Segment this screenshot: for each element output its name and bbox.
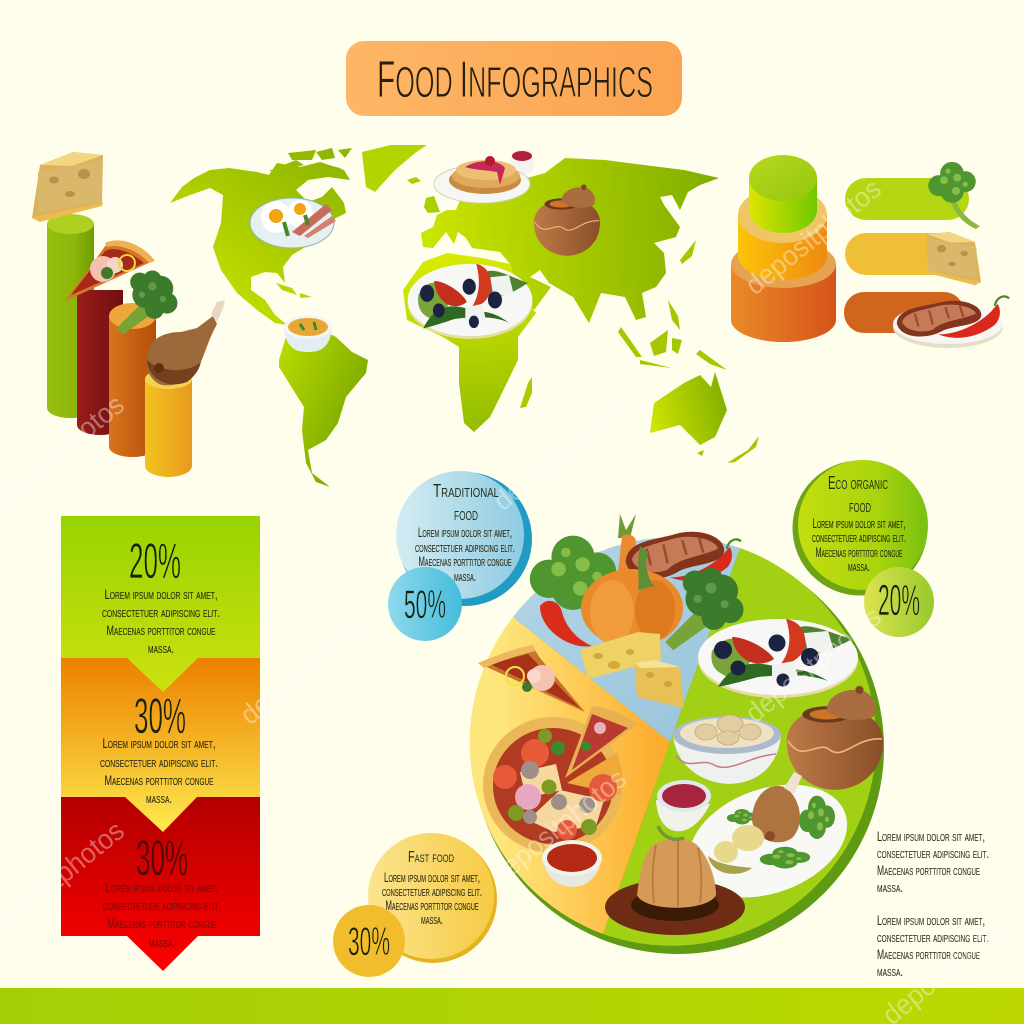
food: broccoli: [665, 568, 744, 650]
text: 30% block: Maecenas porttitor congue: [104, 772, 214, 788]
text: 20% block: 20%: [129, 533, 181, 589]
text: 30% block: consectetuer adipiscing elit.: [100, 754, 218, 770]
plate: steak and pepper: [893, 296, 1009, 348]
icon: parsley: [928, 162, 980, 229]
text: fast food body: Lorem ipsum dolor sit amet,: [384, 869, 480, 885]
title: [346, 41, 682, 116]
watermarks: depositphotos: [487, 389, 635, 517]
text: 30% red block: 30%: [136, 830, 188, 886]
heading: traditional food: Traditional: [433, 481, 499, 501]
plate: salad on map: [408, 264, 532, 339]
badge: 20%: [864, 567, 934, 637]
watermarks: depositphotos: [739, 173, 887, 301]
text: eco body: massa.: [848, 558, 870, 574]
text: 20% block: massa.: [148, 640, 174, 656]
icon: pizza slice: [65, 240, 155, 301]
watermarks: depositphotos: [484, 763, 632, 891]
orange tier: [731, 240, 836, 342]
yellow tier: [738, 187, 827, 280]
Caribbean islands: [276, 283, 312, 298]
text: fast food body: massa.: [421, 911, 443, 927]
yellow cylinder: [145, 369, 192, 477]
continent: Greenland: [362, 145, 427, 192]
slice: fast food yellow: [470, 617, 670, 934]
orange cylinder: [109, 303, 156, 457]
text: 30% red block: consectetuer adipiscing elit.: [103, 897, 221, 913]
Oceania islands: [618, 240, 759, 463]
text block: right column: massa.: [877, 879, 903, 895]
arctic islands: [269, 148, 352, 178]
text: 30% block: 30%: [134, 688, 186, 744]
food: pepper left: [540, 601, 592, 647]
chart: isometric food cylinders: [32, 152, 225, 477]
text: 30% red block: [103, 830, 221, 950]
legend bars: [844, 162, 1009, 348]
bar: yellow: [845, 233, 969, 275]
heading: traditional food: food: [454, 504, 478, 524]
text: 20% block: Maecenas porttitor congue: [106, 622, 216, 638]
bowl: soup on map: [284, 315, 332, 352]
callout: traditional food: [388, 471, 532, 641]
pie chart with food: [470, 514, 884, 954]
badge: 30%: [333, 905, 405, 977]
text: 20% block: Lorem ipsum dolor sit amet,: [104, 586, 218, 602]
food: flan: [605, 826, 745, 935]
text: traditional body: Maecenas porttitor congue: [418, 553, 512, 569]
text: 20% block: consectetuer adipiscing elit.: [102, 604, 220, 620]
plate: eggs and bacon: [250, 198, 336, 248]
badge: 50%: 50%: [404, 583, 446, 627]
icon: cheese wedge: [927, 232, 981, 285]
continent: Eurasia: [421, 158, 719, 323]
food: pizza: [483, 706, 638, 853]
red cylinder: [77, 290, 123, 435]
heading: fast food: Fast food: [408, 849, 454, 866]
Iceland and UK: [407, 177, 440, 213]
text: fast food body: [382, 869, 482, 927]
text: 20% block: [102, 533, 220, 656]
icon: clay pot on map: [534, 184, 600, 256]
icon: cheese: [32, 152, 103, 222]
text: 30% block: massa.: [146, 790, 172, 806]
heading: eco organic food: [828, 473, 888, 516]
heading: eco organic food: Eco organic: [828, 473, 888, 493]
food: carrot: [616, 514, 636, 595]
bar: green: [845, 178, 969, 220]
text: eco body: [812, 515, 906, 574]
continent: South America: [279, 323, 368, 487]
text: fast food body: consectetuer adipiscing elit.: [382, 883, 482, 899]
text: traditional body: massa.: [454, 568, 476, 584]
Madagascar: [520, 377, 532, 408]
slice: eco organic green: [603, 548, 876, 946]
continent: Australia: [650, 372, 727, 445]
icon: broccoli: [117, 271, 178, 335]
text: 30% block: [100, 688, 218, 806]
panel: percentage stack: [61, 516, 260, 971]
world map: [170, 145, 759, 487]
continent: Africa: [403, 253, 536, 432]
text: 30% red block: massa.: [149, 934, 175, 950]
callout: eco organic food: [792, 460, 934, 637]
text: eco body: consectetuer adipiscing elit.: [812, 529, 906, 545]
panel block: green 20%: [61, 516, 260, 692]
slice: traditional blue: [513, 537, 740, 742]
badge: 20%: 20%: [878, 576, 920, 625]
food: salad plate: [698, 619, 858, 698]
text: traditional body: consectetuer adipiscing elit.: [415, 539, 515, 555]
food: dumpling bowl: [673, 715, 781, 784]
icon: drumstick: [146, 300, 225, 385]
text block: right column: [877, 828, 989, 979]
food: chicken plate: [673, 764, 863, 918]
heading: traditional food: [433, 481, 499, 524]
badge: 50%: [388, 567, 462, 641]
bar: orange: [844, 292, 964, 333]
heading: eco organic food: food: [849, 496, 871, 516]
panel block: red 30%: [61, 797, 260, 971]
plate: pancakes: [434, 150, 534, 203]
food: pumpkin: [581, 546, 683, 647]
continent: North America: [170, 162, 350, 325]
text: 30% red block: Lorem ipsum dolor sit amet,: [106, 879, 218, 895]
text block: right column: massa.: [877, 963, 903, 979]
text: eco body: Maecenas porttitor congue: [816, 544, 903, 560]
text: eco body: Lorem ipsum dolor sit amet,: [812, 515, 906, 531]
title: FOOD INFOGRAPHICS: [377, 51, 653, 109]
panel block: orange 30%: [61, 658, 260, 832]
pie rim: [472, 542, 884, 954]
callout: fast food: [333, 833, 497, 977]
badge: 30%: 30%: [348, 920, 390, 964]
green cylinder: [47, 214, 94, 418]
food: lettuce: [530, 536, 616, 610]
watermarks: depositphotos: [234, 603, 382, 731]
watermarks: depositphotos: [739, 601, 887, 729]
text: 30% block: Lorem ipsum dolor sit amet,: [102, 735, 216, 751]
food: pepper top right: [670, 539, 741, 581]
text: fast food body: Maecenas porttitor congue: [386, 897, 479, 913]
food: sauce bowl: [542, 840, 602, 887]
text: traditional body: [415, 524, 515, 584]
food: steak: [626, 532, 724, 579]
chart: stacked cylinders: [731, 155, 836, 342]
food: clay pot: [787, 686, 883, 790]
text: 30% red block: Maecenas porttitor congue: [108, 915, 217, 931]
food: cheese pieces: [580, 632, 684, 708]
food: pizza slice: [478, 645, 585, 712]
text: traditional body: Lorem ipsum dolor sit amet,: [418, 524, 512, 540]
food: cup of jam: [656, 780, 711, 831]
green tier: [749, 155, 817, 233]
footer band: [0, 988, 1024, 1024]
